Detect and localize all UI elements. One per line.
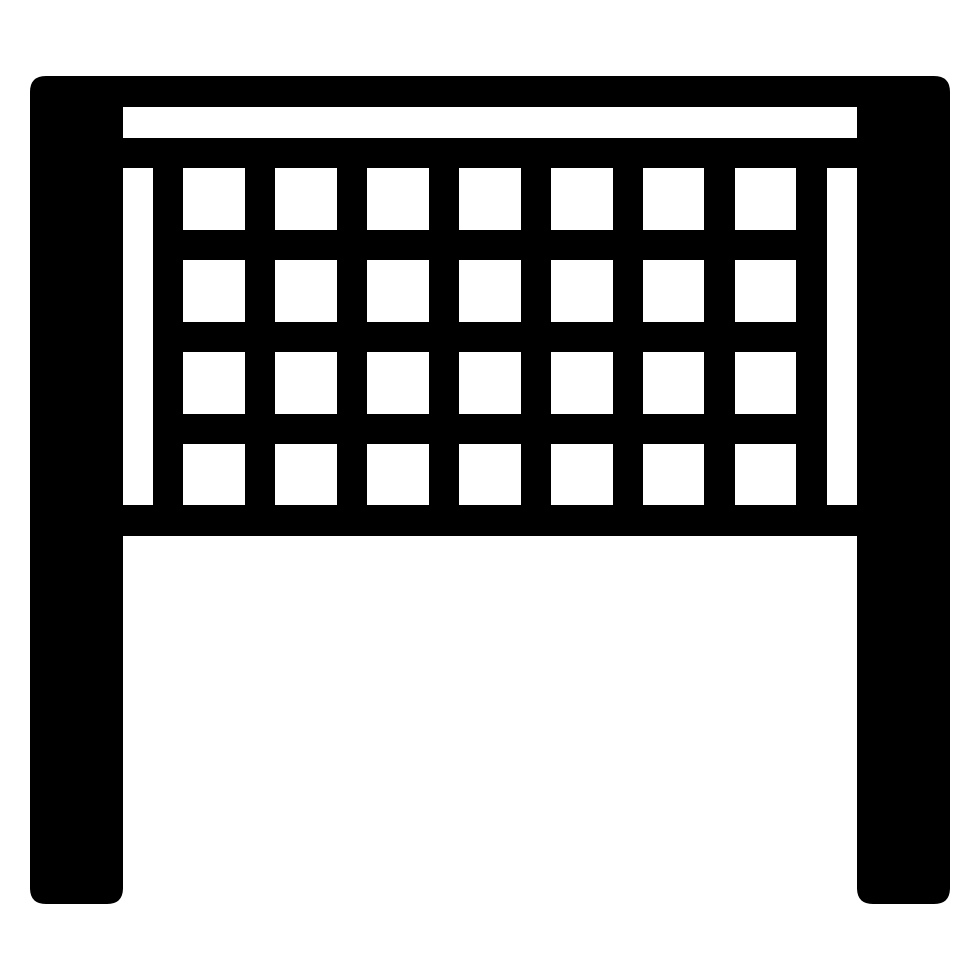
left side opening <box>123 168 153 505</box>
net frame and posts <box>30 76 950 904</box>
right side opening <box>827 168 857 505</box>
top band opening <box>123 107 857 138</box>
net mesh openings <box>183 168 796 505</box>
